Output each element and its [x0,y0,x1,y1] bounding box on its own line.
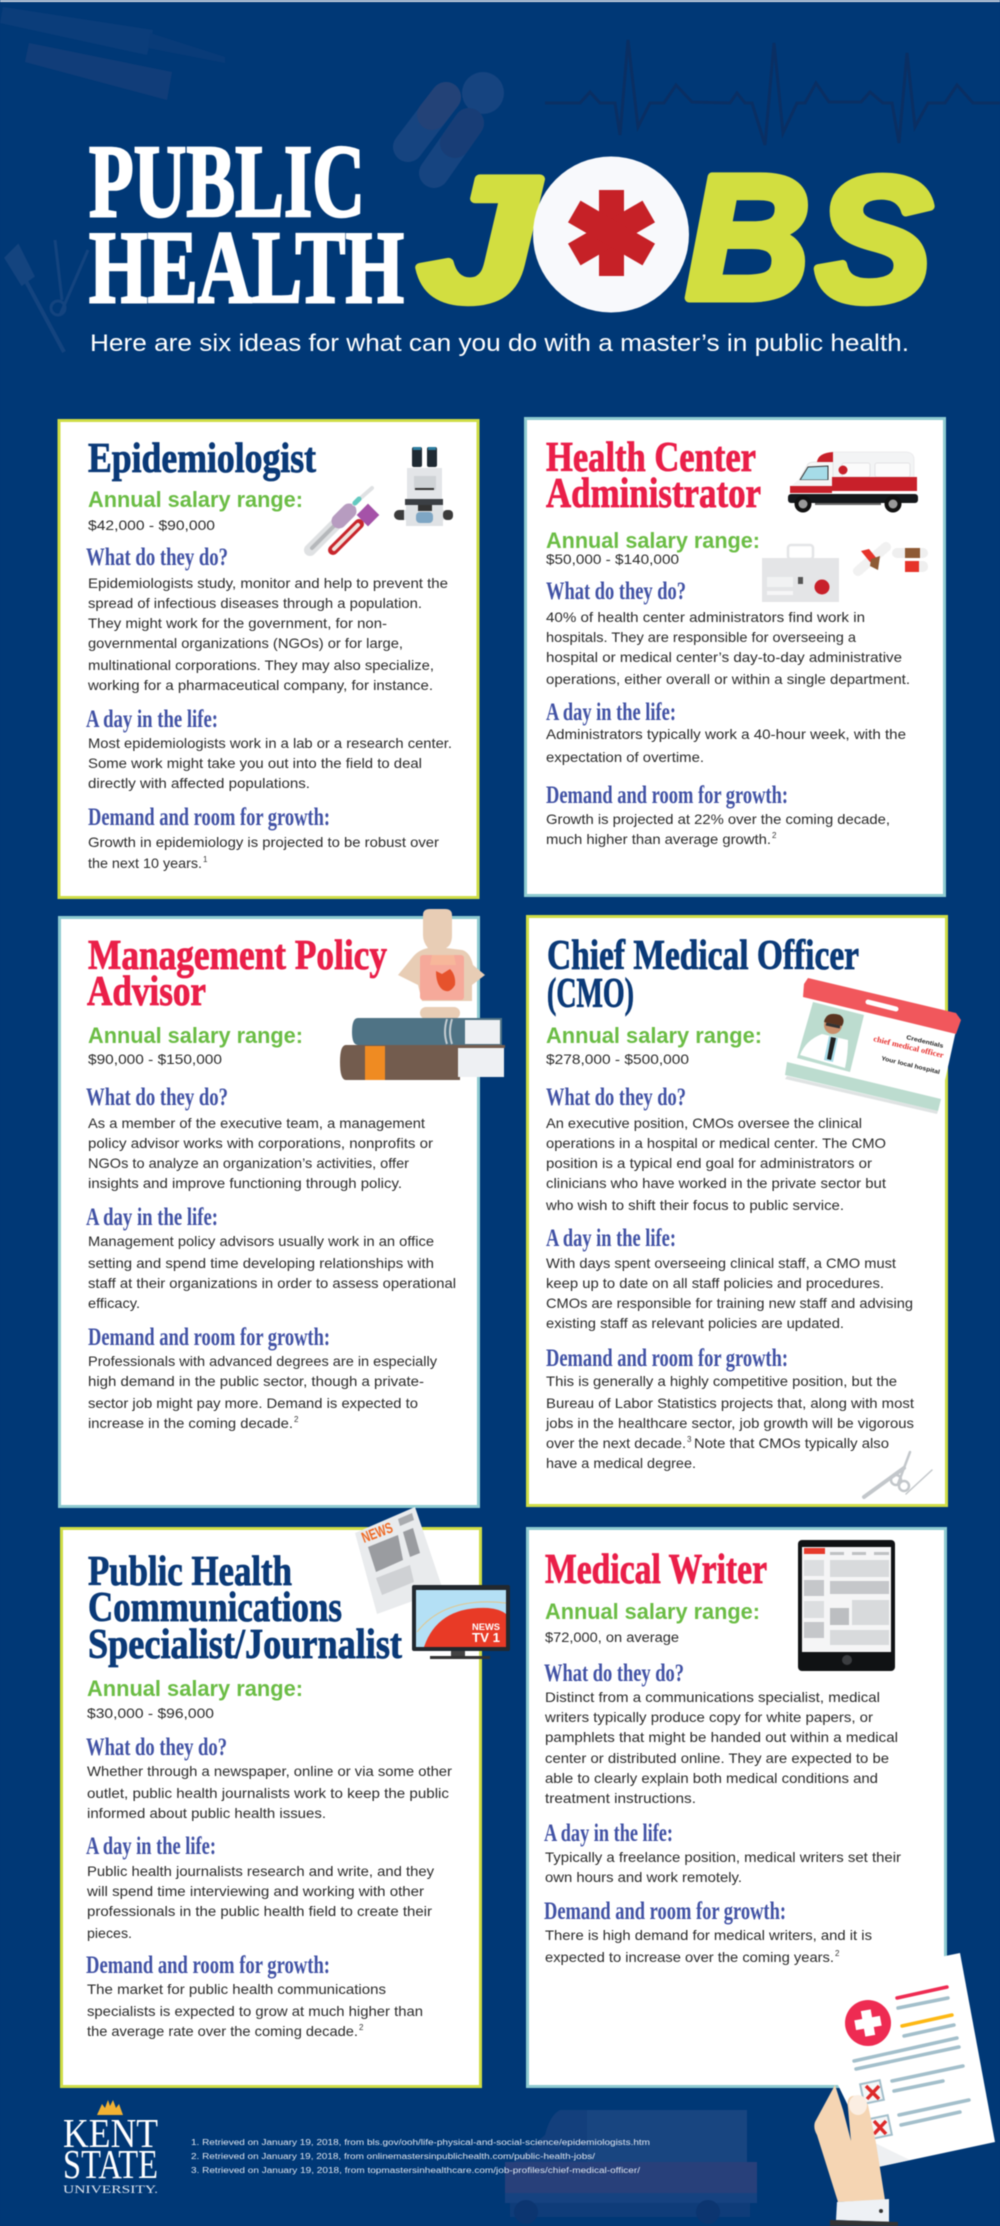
text block: They might work for the government, for non- [88,615,387,631]
text block: will spend time interviewing and working with other [86,1883,424,1899]
text block: setting and spend time developing relationships with [88,1255,434,1271]
heading: job title [547,933,859,1017]
icon: surgical scissors [864,1452,932,1497]
text block [88,1353,437,1431]
footnotes [191,2138,650,2175]
icon: ambulance [788,452,918,512]
icon: newspaper [355,1507,443,1614]
background decoration: heartbeat line [545,40,1000,145]
text block: Bureau of Labor Statistics projects that, along with most [546,1395,914,1411]
text block: over the next decade. [546,1435,686,1451]
text block: expectation of overtime. [546,749,704,765]
text block: staff at their organizations in order to assess operational [88,1275,456,1291]
text block: policy advisor works with corporations, nonprofits or [88,1135,433,1151]
heading: demand: Demand and room for growth: [88,804,330,831]
icon: tablet [798,1540,895,1671]
text block: high demand in the public sector, though a private- [88,1373,424,1389]
heading: job title: Epidemiologist [88,436,316,482]
heading: demand: Demand and room for growth: [544,1898,786,1925]
text block: Note that CMOs typically also [694,1435,889,1451]
text block: operations, either overall or within a single department. [546,671,910,687]
logo: Kent State University: STATE [63,2141,158,2187]
salary value: $30,000 - $96,000 [87,1706,214,1721]
icon: microscope [394,447,453,526]
icon: newspaper: NEWS [359,1519,395,1547]
text block [545,1927,872,1965]
salary label: Annual salary range: [88,1023,303,1048]
title: Public Health [89,124,404,325]
text block: Whether through a newspaper, online or via some other [87,1763,452,1779]
text block: keep up to date on all staff policies and procedures. [546,1275,884,1291]
text block: working for a pharmaceutical company, for instance. [87,677,433,693]
text block [87,575,448,693]
text block: insights and improve functioning through policy. [88,1175,402,1191]
text block: Most epidemiologists work in a lab or a research center. [88,735,452,751]
text block: Management policy advisors usually work in an office [88,1233,434,1249]
text block: Public health journalists research and write, and they [87,1863,434,1879]
text block: There is high demand for medical writers, and it is [545,1927,872,1943]
heading: job title: Public Health [88,1549,292,1595]
text block: Growth is projected at 22% over the coming decade, [546,811,890,827]
salary label: Annual salary range: [87,1676,303,1701]
footnotes: 3. Retrieved on January 19, 2018, from topmastersinhealthcare.com/job-profiles/chief-medical-officer/ [191,2166,641,2175]
text block [544,1689,898,1806]
text block: With days spent overseeing clinical staff, a CMO must [546,1255,896,1271]
text block: directly with affected populations. [88,775,310,791]
heading: demand: Demand and room for growth: [546,1345,788,1372]
heading: what do they do: What do they do? [86,1084,228,1111]
salary label: Annual salary range: [546,1023,762,1048]
text block: spread of infectious diseases through a population. [88,595,422,611]
heading: a day in the life: A day in the life: [546,699,676,726]
text block: Some work might take you out into the field to deal [88,755,422,771]
heading: job title [546,435,761,517]
icon: books [340,1018,505,1080]
heading: job title: Advisor [87,969,206,1015]
text block: 3 [687,1435,692,1444]
text block: Typically a freelance position, medical writers set their [545,1849,901,1865]
heading: job title: Specialist/Journalist [88,1622,402,1668]
text block: able to clearly explain both medical conditions and [545,1770,878,1786]
text block: hospitals. They are responsible for overseeing a [546,629,856,645]
heading: job title: Communications [88,1585,342,1631]
text block [545,1849,901,1885]
salary value: $72,000, on average [545,1630,679,1645]
heading: job title [87,933,387,1015]
text block [546,811,890,847]
text block: An executive position, CMOs oversee the clinical [546,1115,862,1131]
text block [87,1981,423,2039]
title: Public Health: HEALTH [89,210,404,325]
footnotes: 1. Retrieved on January 19, 2018, from bls.gov/ooh/life-physical-and-social-science/epidemiologists.htm [191,2138,650,2147]
icon: test tubes [310,488,379,550]
text block: writers typically produce copy for white papers, or [544,1709,873,1725]
text block: As a member of the executive team, a management [88,1115,425,1131]
text block: center or distributed online. They are expected to be [545,1750,889,1766]
text block [88,1233,456,1311]
heading: demand: Demand and room for growth: [86,1952,330,1979]
heading: a day in the life: A day in the life: [86,1204,218,1231]
panel: Health Center Administrator [526,418,944,896]
heading: job title: Health Center [546,435,756,481]
text block: Epidemiologists study, monitor and help to prevent the [88,575,448,591]
heading: a day in the life: A day in the life: [546,1225,676,1252]
text block: position is a typical end goal for administrators or [546,1155,872,1171]
text block: existing staff as relevant policies are updated. [546,1315,844,1331]
text block: 1 [203,855,208,864]
icon: ID badge: Credentials [906,1035,945,1050]
heading: what do they do: What do they do? [546,1084,686,1111]
icon: hand holding medical form [814,1953,995,2226]
icon: pills [858,547,928,572]
heading: what do they do: What do they do? [86,1734,227,1761]
background decoration: syringe and slide [0,7,225,100]
heading: a day in the life: A day in the life: [86,706,218,733]
panel: Chief Medical Officer [528,916,961,1506]
logo: Kent State University: KENT [63,2110,158,2156]
text block: own hours and work remotely. [545,1869,742,1885]
panel: Epidemiologist [59,420,478,898]
text block [546,609,910,687]
icon: television: TV 1 [472,1630,500,1645]
salary label: Annual salary range: [88,487,303,512]
logo: Kent State University [63,2100,158,2196]
text block: jobs in the healthcare sector, job growth will be vigorous [545,1415,914,1431]
panel: Public Health Communications Specialist/Journalist [62,1507,510,2086]
heading: job title: Management Policy [88,933,387,979]
text block [86,1863,434,1941]
text block: informed about public health issues. [87,1805,326,1821]
text block: treatment instructions. [545,1790,696,1806]
text block: 40% of health center administrators find work in [546,609,865,625]
icon: ID badge [785,978,961,1114]
logo: Kent State University: UNIVERSITY. [63,2184,158,2196]
heading: demand: Demand and room for growth: [88,1324,330,1351]
text block: pieces. [87,1925,132,1941]
icon: O with star of life [533,156,689,312]
text block: This is generally a highly competitive position, but the [546,1373,897,1389]
heading: job title: (CMO) [547,971,634,1017]
text block: Growth in epidemiology is projected to be robust over [88,834,439,850]
text block [88,834,439,871]
text block: clinicians who have worked in the private sector but [546,1175,886,1191]
text block: efficacy. [88,1295,140,1311]
text block: have a medical degree. [546,1455,696,1471]
text block: pamphlets that might be handed out within a medical [545,1729,898,1745]
panel: Medical Writer [528,1528,946,2086]
salary value: $42,000 - $90,000 [88,518,215,533]
heading: job title: Medical Writer [545,1547,767,1593]
icon: sun [97,2100,123,2115]
icon: ID badge: chief medical officer [873,1034,945,1060]
text block: 2 [294,1415,299,1424]
heading: what do they do: What do they do? [86,544,228,571]
text block [546,1255,913,1331]
text block: expected to increase over the coming years. [545,1949,834,1965]
heading: job title: Administrator [546,471,761,517]
text block: who wish to shift their focus to public service. [545,1197,844,1213]
text block: much higher than average growth. [546,831,771,847]
salary label: Annual salary range: [546,528,760,553]
icon: anatomy torso [398,909,485,1019]
text block: specialists is expected to grow at much higher than [87,2003,423,2019]
title: Jobs: S [816,142,932,338]
text block: the average rate over the coming decade. [87,2023,358,2039]
footnotes: 2. Retrieved on January 19, 2018, from onlinemastersinpublichealth.com/public-health-jobs/ [191,2152,596,2161]
text block: professionals in the public health field to create their [87,1903,432,1919]
text block: sector job might pay more. Demand is expected to [88,1395,418,1411]
text block [87,1763,452,1821]
title: Jobs [418,140,932,338]
heading: demand: Demand and room for growth: [546,782,788,809]
text block [88,735,452,791]
text block [546,726,906,765]
title: Jobs: B [686,140,810,336]
heading: what do they do: What do they do? [546,578,686,605]
text block: Administrators typically work a 40-hour week, with the [546,726,906,742]
salary value: $50,000 - $140,000 [546,552,679,567]
title: Jobs: J [418,142,540,338]
text block: 2 [772,831,777,840]
heading: job title [88,1549,402,1668]
text block: hospital or medical center’s day-to-day administrative [546,649,902,665]
panel: Management Policy Advisor [60,909,505,1506]
text block [545,1115,886,1213]
background decoration: faded ambulance [505,2110,757,2224]
text block: outlet, public health journalists work to keep the public [87,1785,449,1801]
icon: television [412,1585,510,1659]
background decoration: surgical tools [6,240,88,352]
text block: increase in the coming decade. [88,1415,293,1431]
text block: 2 [835,1949,840,1958]
text block: the next 10 years. [88,855,202,871]
text block: multinational corporations. They may also specialize, [88,657,434,673]
text block [88,1115,433,1191]
heading: what do they do: What do they do? [544,1660,684,1687]
text block: Distinct from a communications specialist, medical [545,1689,880,1705]
text block: operations in a hospital or medical center. The CMO [546,1135,886,1151]
text block: The market for public health communications [87,1981,386,1997]
icon: television: NEWS [472,1622,500,1632]
text block: NGOs to analyze an organization’s activities, offer [88,1155,409,1171]
text block [545,1373,914,1471]
salary value: $278,000 - $500,000 [546,1052,689,1067]
background decoration: pills [408,72,504,173]
text block: CMOs are responsible for training new staff and advising [546,1295,913,1311]
subtitle: Here are six ideas for what can you do with a master’s in public health. [90,330,909,357]
text block: Professionals with advanced degrees are in especially [88,1353,437,1369]
heading: a day in the life: A day in the life: [544,1820,673,1847]
salary label: Annual salary range: [545,1599,760,1624]
text block: 2 [359,2023,364,2032]
salary value: $90,000 - $150,000 [88,1052,222,1067]
heading: job title: Chief Medical Officer [547,933,859,979]
icon: ID badge: Your local hospital [881,1056,941,1076]
text block: governmental organizations (NGOs) or for large, [88,635,403,651]
title: Public Health: PUBLIC [89,124,365,239]
heading: a day in the life: A day in the life: [86,1833,216,1860]
icon: first aid case [762,545,839,602]
